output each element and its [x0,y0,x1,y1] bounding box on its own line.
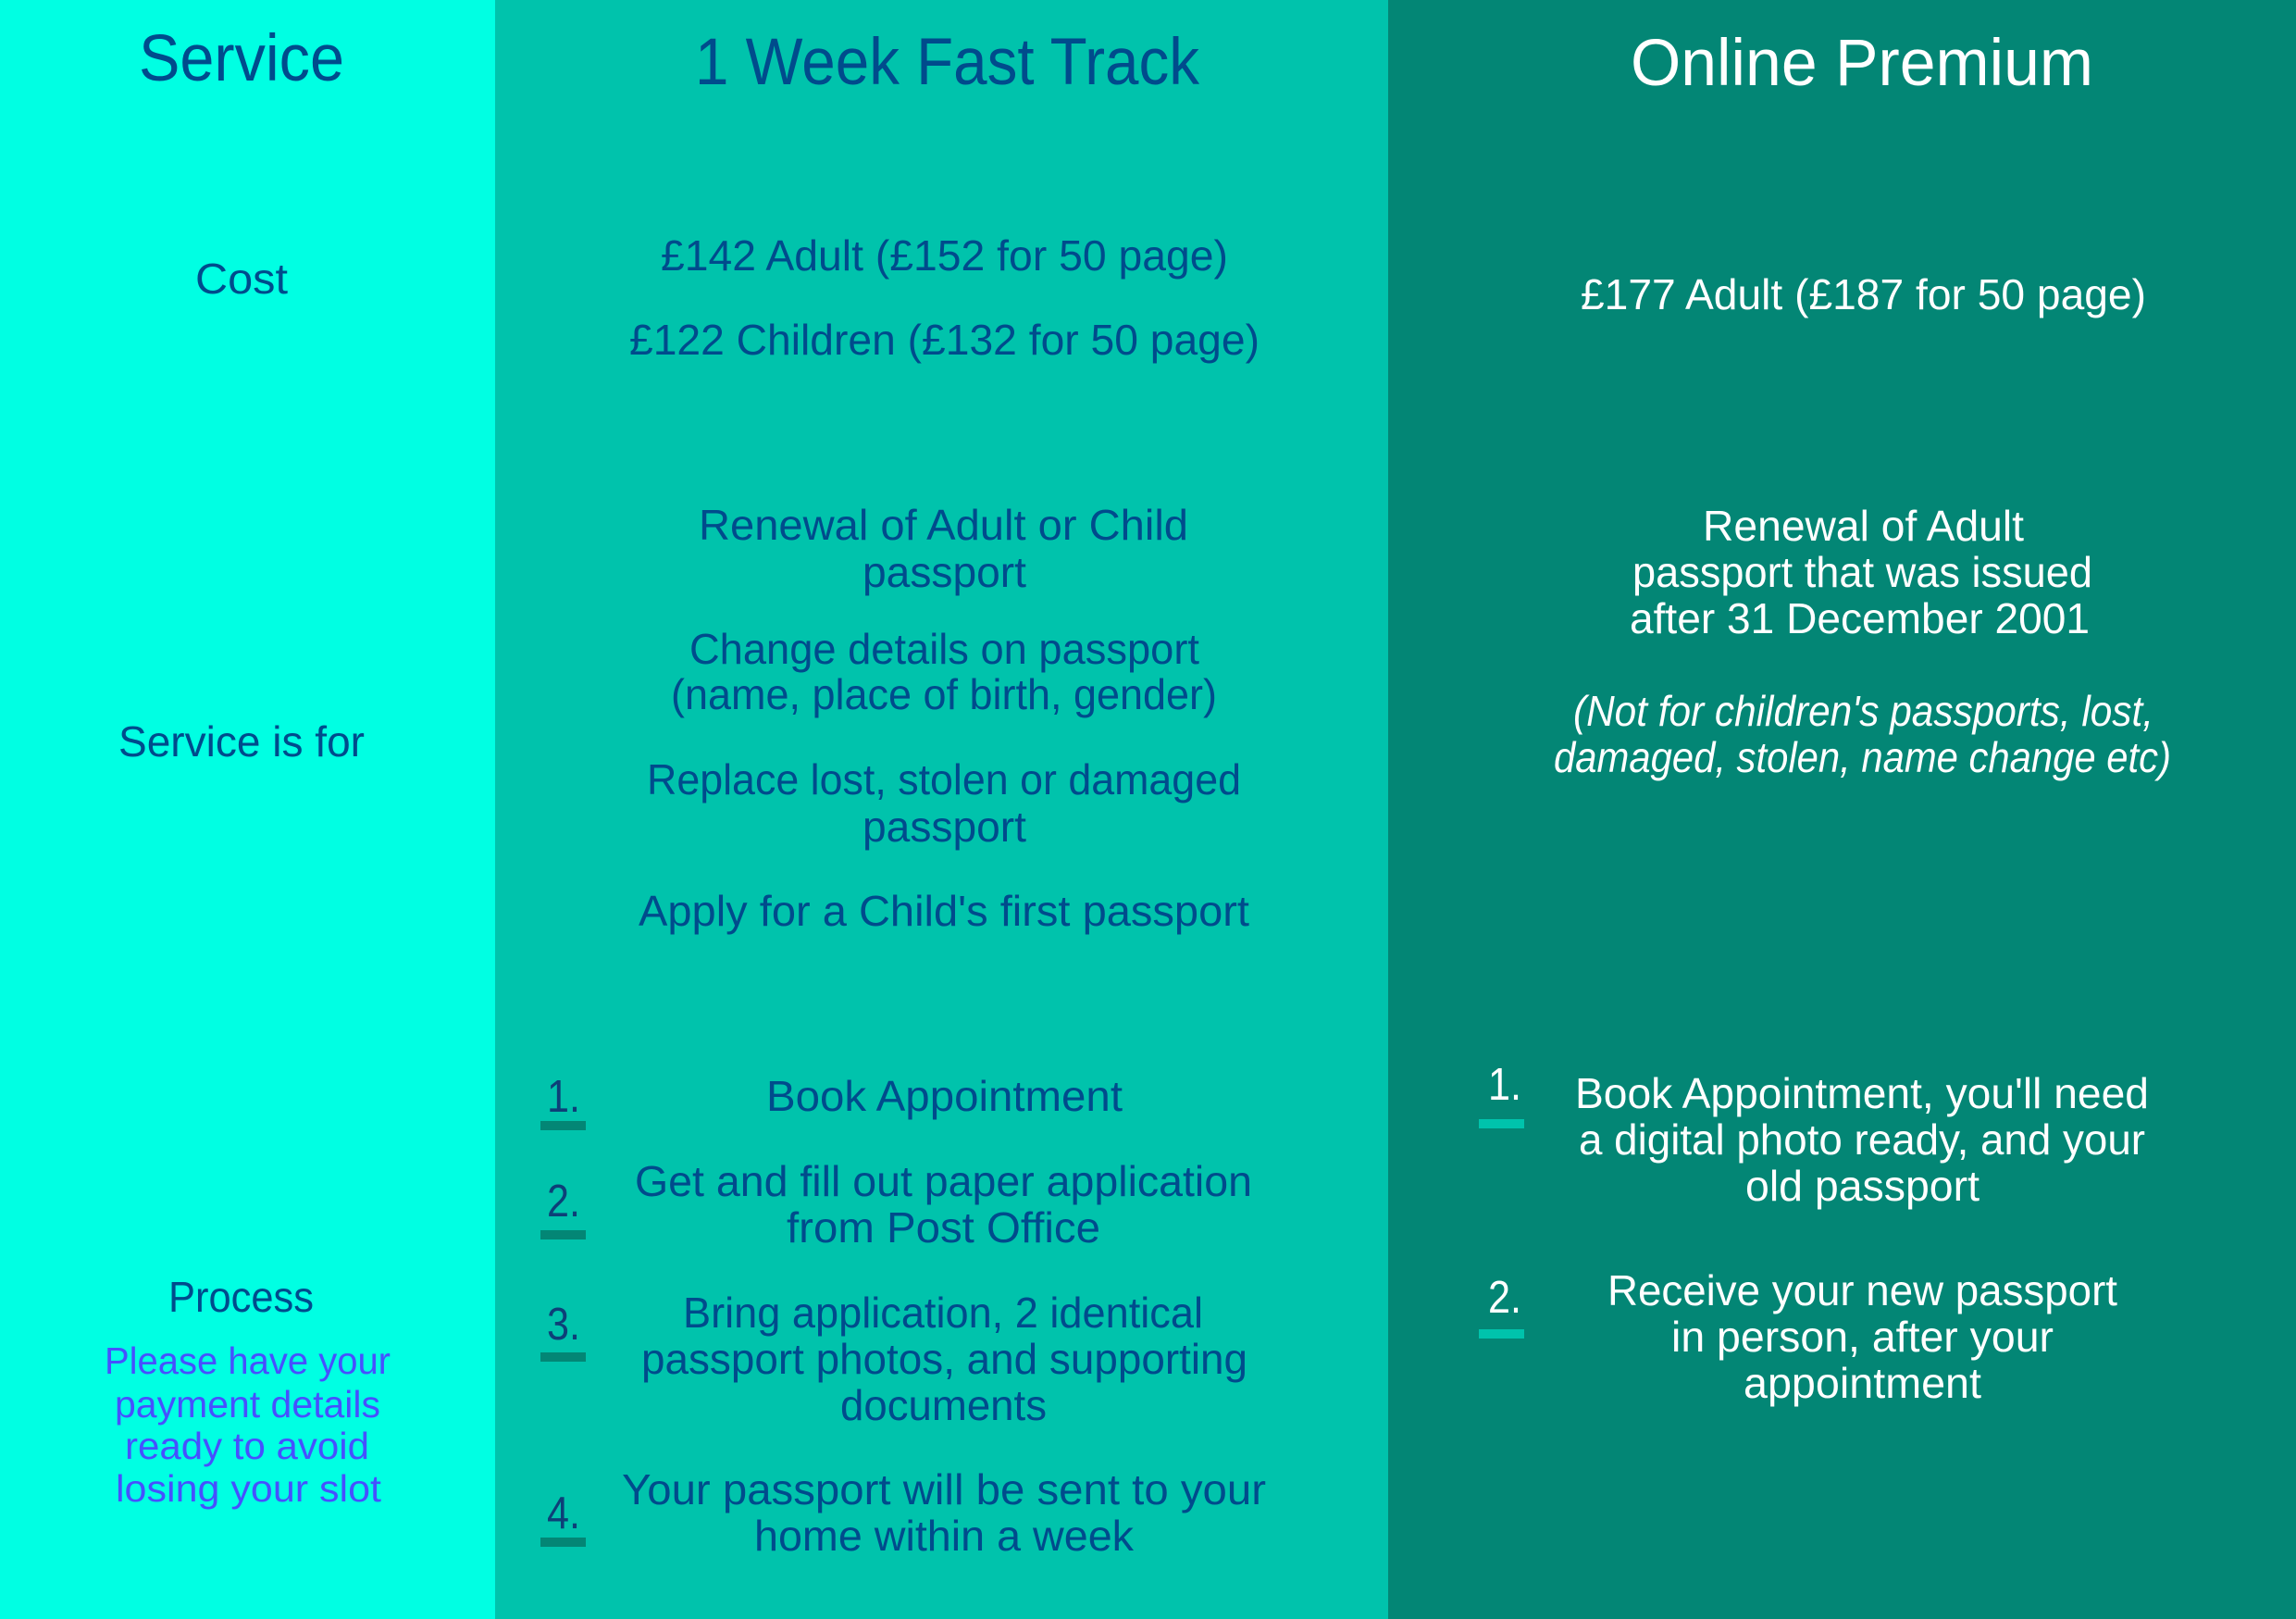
service eligibility text: passport that was issued [1632,548,2092,596]
note: payment details reminder: payment details [115,1383,380,1426]
row label: Process: Process [168,1273,314,1321]
panel: Online Premium [1388,0,2296,1619]
note: payment details reminder: ready to avoid [125,1425,369,1467]
panel: service labels [0,0,495,1619]
service eligibility text: Apply for a Child's first passport [639,887,1249,935]
service eligibility text: passport [863,548,1026,596]
process step 3: passport photos, and supporting [641,1335,1247,1383]
process step 2: from Post Office [787,1203,1100,1252]
process step 3: Bring application, 2 identical [683,1289,1203,1337]
cost text: £122 Children (£132 for 50 page) [629,316,1260,364]
cost text [629,231,1260,364]
process step 2: in person, after your [1671,1313,2054,1361]
process step 4: 4. [547,1488,580,1538]
process step 1: Book Appointment [766,1072,1123,1120]
heading: Service: Service [139,22,344,95]
note: payment details reminder: Please have your [105,1339,391,1382]
service eligibility text: Change details on passport [689,625,1199,673]
panel: 1 Week Fast Track [495,0,1388,1619]
service eligibility text: (Not for children's passports, lost, [1573,687,2153,735]
process step 2: 2. [1488,1273,1521,1323]
row label: Cost: Cost [195,255,288,303]
process step 2: 2. [547,1177,580,1227]
service eligibility text: Replace lost, stolen or damaged [647,755,1241,803]
note: payment details reminder: losing your slot [116,1467,382,1510]
process step 1 [540,1072,1123,1130]
heading: Online Premium: Online Premium [1631,27,2093,100]
note: payment details reminder [105,1339,391,1510]
service eligibility text: after 31 December 2001 [1630,594,2090,642]
process step 2: appointment [1744,1359,1981,1407]
process step 3: 3. [547,1300,580,1350]
heading: 1 Week Fast Track: 1 Week Fast Track [695,26,1199,99]
service eligibility text: Renewal of Adult [1703,502,2024,550]
process step 1: old passport [1745,1162,1980,1210]
process step 2: Get and fill out paper application [635,1157,1252,1205]
process step 2 [1479,1266,2117,1407]
row label: Service is for: Service is for [118,717,365,766]
cost text: £142 Adult (£152 for 50 page) [661,231,1228,280]
service eligibility text: passport [863,803,1026,851]
process step 4: Your passport will be sent to your [622,1465,1266,1513]
service eligibility text [1554,502,2171,781]
process step 1: 1. [1488,1060,1521,1110]
process step 4 [540,1465,1266,1560]
process step 3: documents [840,1381,1047,1429]
process step 1: Book Appointment, you'll need [1575,1069,2149,1117]
service eligibility text: (name, place of birth, gender) [671,670,1217,718]
process step 1: 1. [547,1072,580,1122]
service eligibility text: damaged, stolen, name change etc) [1554,733,2171,781]
process step 2 [540,1157,1252,1252]
service eligibility text: Renewal of Adult or Child [699,501,1188,549]
process step 3 [540,1289,1247,1429]
service eligibility text [639,501,1249,935]
process step 2: Receive your new passport [1607,1266,2117,1314]
process step 1: a digital photo ready, and your [1579,1115,2145,1164]
cost text: £177 Adult (£187 for 50 page) [1581,270,2146,318]
process step 4: home within a week [754,1512,1135,1560]
process step 1 [1479,1060,2149,1210]
